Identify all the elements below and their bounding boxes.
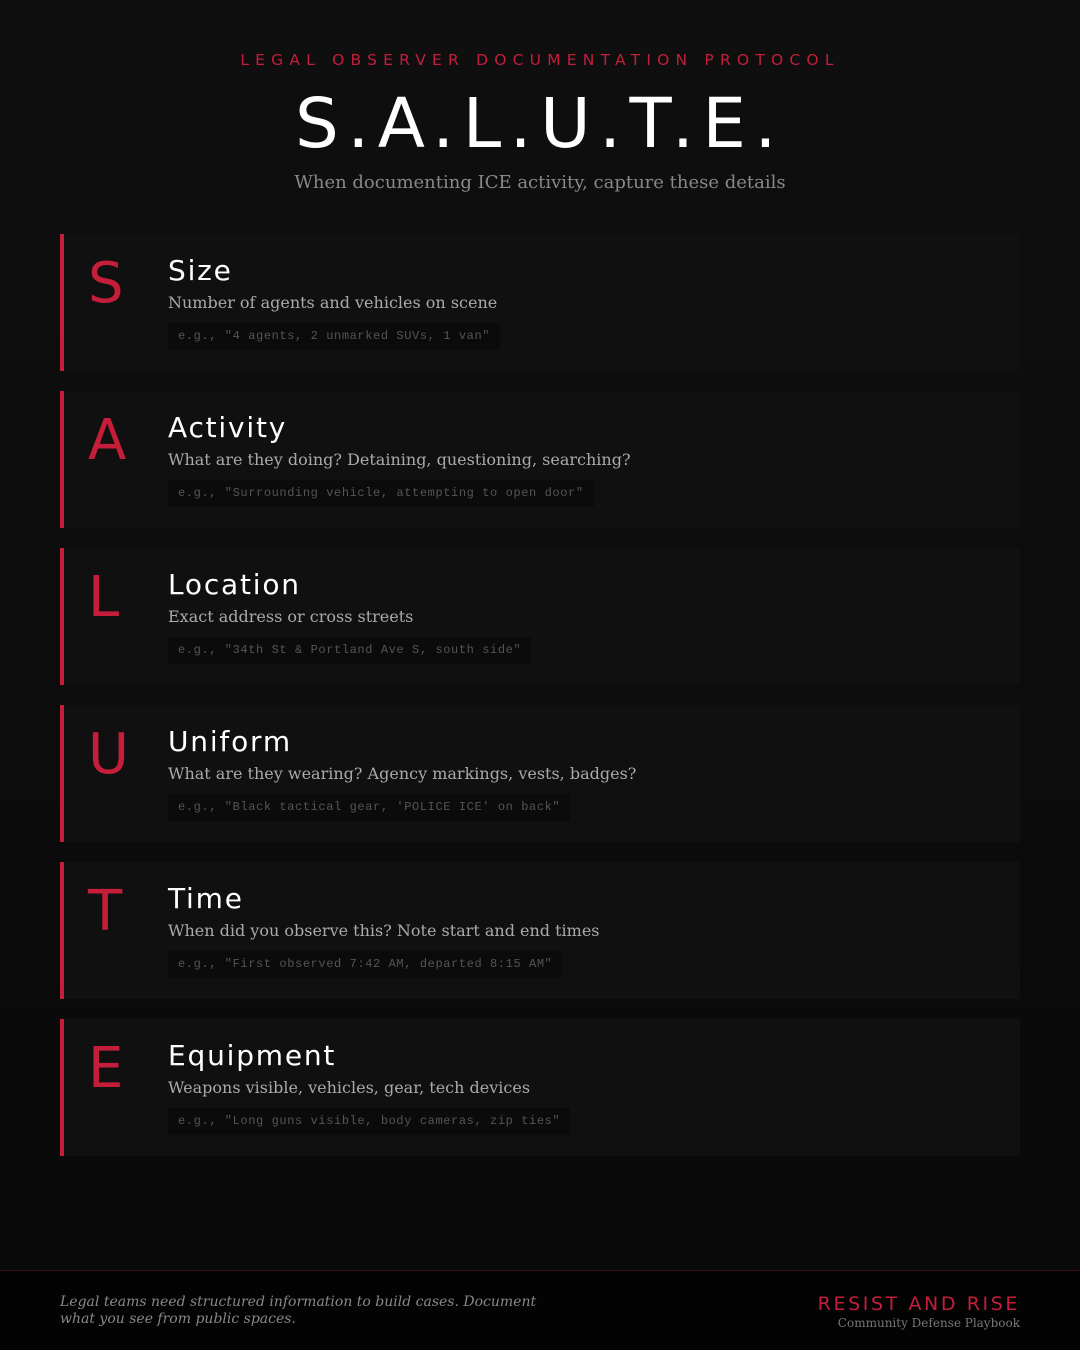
example	[168, 323, 500, 350]
example	[168, 951, 562, 978]
description: Weapons visible, vehicles, gear, tech devices	[168, 1078, 530, 1097]
example	[168, 794, 570, 821]
description: Exact address or cross streets	[168, 607, 413, 626]
description: What are they doing? Detaining, questioning, searching?	[168, 450, 631, 469]
footer note	[60, 1294, 536, 1327]
panel: uniform	[60, 705, 1020, 842]
example	[168, 1108, 570, 1135]
letter E: E	[88, 1036, 123, 1101]
brand: RESIST AND RISE	[818, 1293, 1020, 1315]
footer note: Legal teams need structured information to build cases. Document	[60, 1294, 536, 1310]
example: e.g., "First observed 7:42 AM, departed 8:15 AM"	[178, 957, 552, 971]
letter S: S	[88, 251, 124, 316]
description: When did you observe this? Note start and end times	[168, 921, 600, 940]
heading: Uniform	[168, 725, 292, 758]
example: e.g., "Black tactical gear, 'POLICE ICE' on back"	[178, 800, 560, 814]
example	[168, 637, 531, 664]
kicker: LEGAL OBSERVER DOCUMENTATION PROTOCOL	[240, 51, 840, 69]
example: e.g., "Surrounding vehicle, attempting to open door"	[178, 486, 584, 500]
panel: size	[60, 234, 1020, 371]
brand subtitle: Community Defense Playbook	[838, 1316, 1020, 1330]
heading: Location	[168, 568, 301, 601]
heading: Activity	[168, 411, 287, 444]
description: Number of agents and vehicles on scene	[168, 293, 497, 312]
heading: Equipment	[168, 1039, 336, 1072]
title: S.A.L.U.T.E.	[295, 84, 785, 164]
footer note: what you see from public spaces.	[60, 1311, 296, 1327]
example: e.g., "34th St & Portland Ave S, south side"	[178, 643, 521, 657]
example: e.g., "4 agents, 2 unmarked SUVs, 1 van"	[178, 329, 490, 343]
example	[168, 480, 594, 507]
panel: time	[60, 862, 1020, 999]
panel: location	[60, 548, 1020, 685]
letter T: T	[88, 879, 122, 944]
heading: Size	[168, 254, 233, 287]
letter A: A	[88, 408, 126, 473]
panel: activity	[60, 391, 1020, 528]
heading: Time	[168, 882, 244, 915]
letter L: L	[88, 565, 119, 630]
description: What are they wearing? Agency markings, vests, badges?	[168, 764, 636, 783]
subtitle: When documenting ICE activity, capture these details	[294, 172, 786, 193]
example: e.g., "Long guns visible, body cameras, zip ties"	[178, 1114, 560, 1128]
letter U: U	[88, 722, 129, 787]
footer	[0, 1270, 1080, 1350]
panel: equipment	[60, 1019, 1020, 1156]
